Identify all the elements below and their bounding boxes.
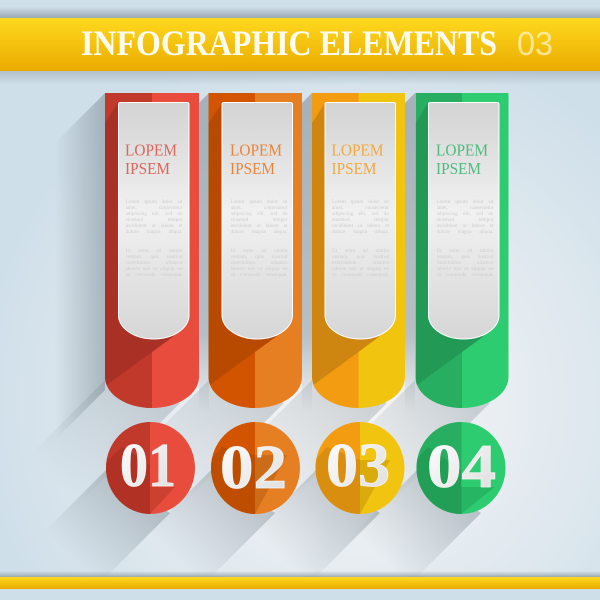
body text: dolore magna aliqua. <box>230 229 288 235</box>
body text <box>230 199 288 283</box>
body text: Lorem ipsum dolor sit <box>436 199 494 205</box>
body text: incididunt ut labore et <box>332 223 389 229</box>
body text: Lorem ipsum dolor sit <box>126 199 182 205</box>
card shadow on bar <box>105 103 174 385</box>
badge 01 <box>106 422 195 514</box>
body text: Ut enim ad minim <box>332 248 389 254</box>
body text: ea commodo consequat. <box>126 272 182 278</box>
body text: dolore magna aliqua. <box>332 229 389 235</box>
badge 04 <box>416 422 506 514</box>
body text: exercitation ullamco <box>436 260 494 266</box>
body text: veniam, quis nostrud <box>230 254 288 260</box>
body text: dolore magna aliqua. <box>126 229 182 235</box>
body text: Ut enim ad minim <box>436 248 494 254</box>
circle long shadows <box>0 470 481 600</box>
body text <box>332 199 389 283</box>
panel: 02 orange <box>208 93 302 408</box>
heading: LOPEM <box>436 140 488 160</box>
header band <box>0 18 600 71</box>
footer strip <box>0 589 600 600</box>
header shadow <box>0 71 600 85</box>
body text: Ut enim ad minim <box>230 248 288 254</box>
body text <box>126 199 182 283</box>
body text: ea commodo consequat. <box>436 272 494 278</box>
body text: ea commodo consequat. <box>332 272 389 278</box>
bar light half <box>416 93 508 408</box>
bar light half <box>105 93 199 408</box>
badge 02 <box>211 422 300 514</box>
body text: veniam, quis nostrud <box>126 254 182 260</box>
bar dark half <box>208 93 255 408</box>
card <box>325 102 396 339</box>
top shadow strip <box>0 7 600 18</box>
bar dark half <box>416 93 462 408</box>
heading: LOPEM <box>230 140 282 160</box>
panel: 04 green <box>416 93 508 408</box>
issue number: 03 <box>517 25 553 62</box>
body text: exercitation ullamco <box>126 260 182 266</box>
panel: 01 red <box>105 93 199 408</box>
body text <box>436 199 494 283</box>
card <box>118 102 189 339</box>
body text: Ut enim ad minim <box>126 248 182 254</box>
body text: exercitation ullamco <box>332 260 389 266</box>
bar light half <box>312 93 405 408</box>
body text: adipiscing elit, sed do <box>436 211 494 217</box>
panel: 03 yellow <box>312 93 405 408</box>
heading: IPSEM <box>230 159 275 178</box>
body text: amet, consectetur <box>436 205 494 211</box>
body text: Lorem ipsum dolor sit <box>332 199 389 205</box>
body text: ea commodo consequat. <box>230 272 288 278</box>
body text: dolore magna aliqua. <box>436 229 494 235</box>
bar dark half <box>105 93 152 408</box>
heading: IPSEM <box>332 159 376 178</box>
card <box>428 102 499 339</box>
heading: IPSEM <box>436 159 481 178</box>
body text: incididunt ut labore et <box>436 223 494 229</box>
heading: IPSEM <box>125 159 170 178</box>
body text: eiusmod tempor <box>230 217 288 223</box>
body text: laboris nisi ut aliquip ex <box>126 266 182 272</box>
badge 03: 03 <box>326 432 390 500</box>
footer band <box>0 577 600 589</box>
body text: veniam, quis nostrud <box>436 254 494 260</box>
body text: eiusmod tempor <box>436 217 494 223</box>
body text: Lorem ipsum dolor sit <box>230 199 288 205</box>
body text: incididunt ut labore et <box>126 223 182 229</box>
body text: veniam, quis nostrud <box>332 254 389 260</box>
body text: amet, consectetur <box>332 205 389 211</box>
body text: laboris nisi ut aliquip ex <box>332 266 389 272</box>
footer shadow <box>0 571 600 577</box>
body text: exercitation ullamco <box>230 260 288 266</box>
body text: adipiscing elit, sed do <box>126 211 182 217</box>
badge 02: 02 <box>220 434 287 502</box>
heading: LOPEM <box>125 140 177 160</box>
body text: adipiscing elit, sed do <box>230 211 288 217</box>
body text: laboris nisi ut aliquip ex <box>436 266 494 272</box>
badge 01: 01 <box>120 432 176 500</box>
body text: eiusmod tempor <box>332 217 389 223</box>
badge 04: 04 <box>427 433 496 501</box>
body text: incididunt ut labore et <box>230 223 288 229</box>
bar long shadows <box>0 93 490 523</box>
body text: laboris nisi ut aliquip ex <box>230 266 288 272</box>
title: INFOGRAPHIC ELEMENTS <box>81 23 497 63</box>
body text: amet, consectetur <box>126 205 182 211</box>
body text: adipiscing elit, sed do <box>332 211 389 217</box>
badge 03 <box>316 422 404 514</box>
card shadow on bar <box>312 103 380 385</box>
heading: LOPEM <box>332 140 384 160</box>
card shadow on bar <box>416 103 484 385</box>
body text: eiusmod tempor <box>126 217 182 223</box>
bar dark half <box>312 93 358 408</box>
card shadow on bar <box>208 103 277 385</box>
body text: amet, consectetur <box>230 205 288 211</box>
bar light half <box>208 93 302 408</box>
card <box>222 102 292 339</box>
